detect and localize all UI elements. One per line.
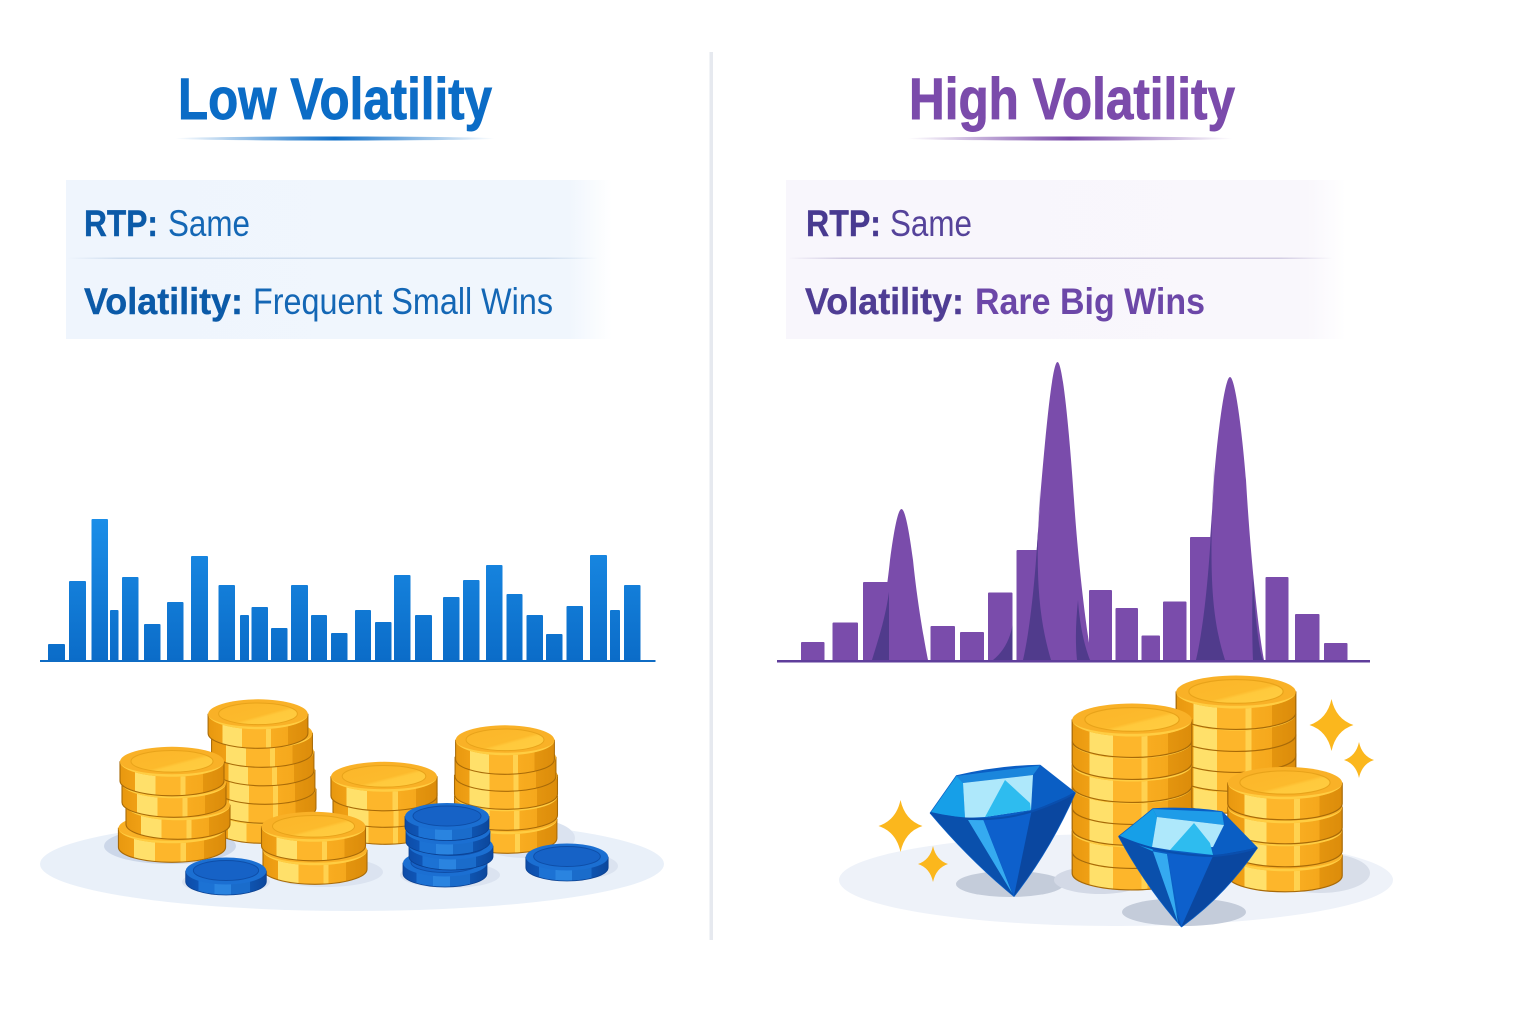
icon: sparkles: [878, 699, 1374, 882]
coin stack: right: [455, 725, 557, 853]
single chip left: [186, 858, 266, 895]
volatility row: [805, 281, 1205, 322]
coin stack: left: [118, 747, 230, 862]
coin stack: center: [331, 762, 437, 844]
title underline: [175, 136, 495, 140]
RTP row: [84, 203, 250, 244]
illustration: coins and chips: [40, 699, 664, 911]
title underline: [907, 136, 1233, 140]
chip stack: [403, 803, 493, 887]
volatility row: Rare Big Wins: [975, 281, 1205, 322]
coin stack: right front: [1228, 767, 1342, 892]
coin stack: front: [262, 812, 367, 884]
volatility row: Frequent Small Wins: [253, 281, 553, 322]
RTP row: Same: [168, 203, 250, 244]
RTP row: RTP:: [84, 203, 158, 244]
illustration: gems and coins: [839, 676, 1393, 926]
volatility row: Volatility:: [84, 281, 243, 322]
volatility row: Volatility:: [805, 281, 964, 322]
icon: large gem: [930, 766, 1075, 896]
panel: high volatility: [777, 67, 1393, 926]
info box: high volatility: [786, 180, 1346, 339]
RTP row: RTP:: [806, 203, 881, 244]
ground shadow: [839, 834, 1393, 926]
RTP row: [806, 203, 972, 244]
title: low volatility: Low Volatility: [178, 67, 492, 132]
RTP row: Same: [890, 203, 972, 244]
single chip right: [526, 844, 608, 881]
chart: rare big wins spikes: [777, 362, 1370, 662]
icon: small gem: [1119, 808, 1257, 926]
bar chart: frequent small wins: [40, 519, 656, 662]
panel: low volatility: [40, 67, 664, 911]
coin stack: back: [1176, 676, 1296, 813]
ground shadow: [40, 817, 664, 911]
info box: low volatility: [66, 180, 612, 339]
title: high volatility: High Volatility: [909, 67, 1235, 132]
coin stack: middle tall: [1072, 704, 1192, 890]
coin stack: back tall: [208, 699, 316, 843]
volatility row: [84, 281, 553, 322]
